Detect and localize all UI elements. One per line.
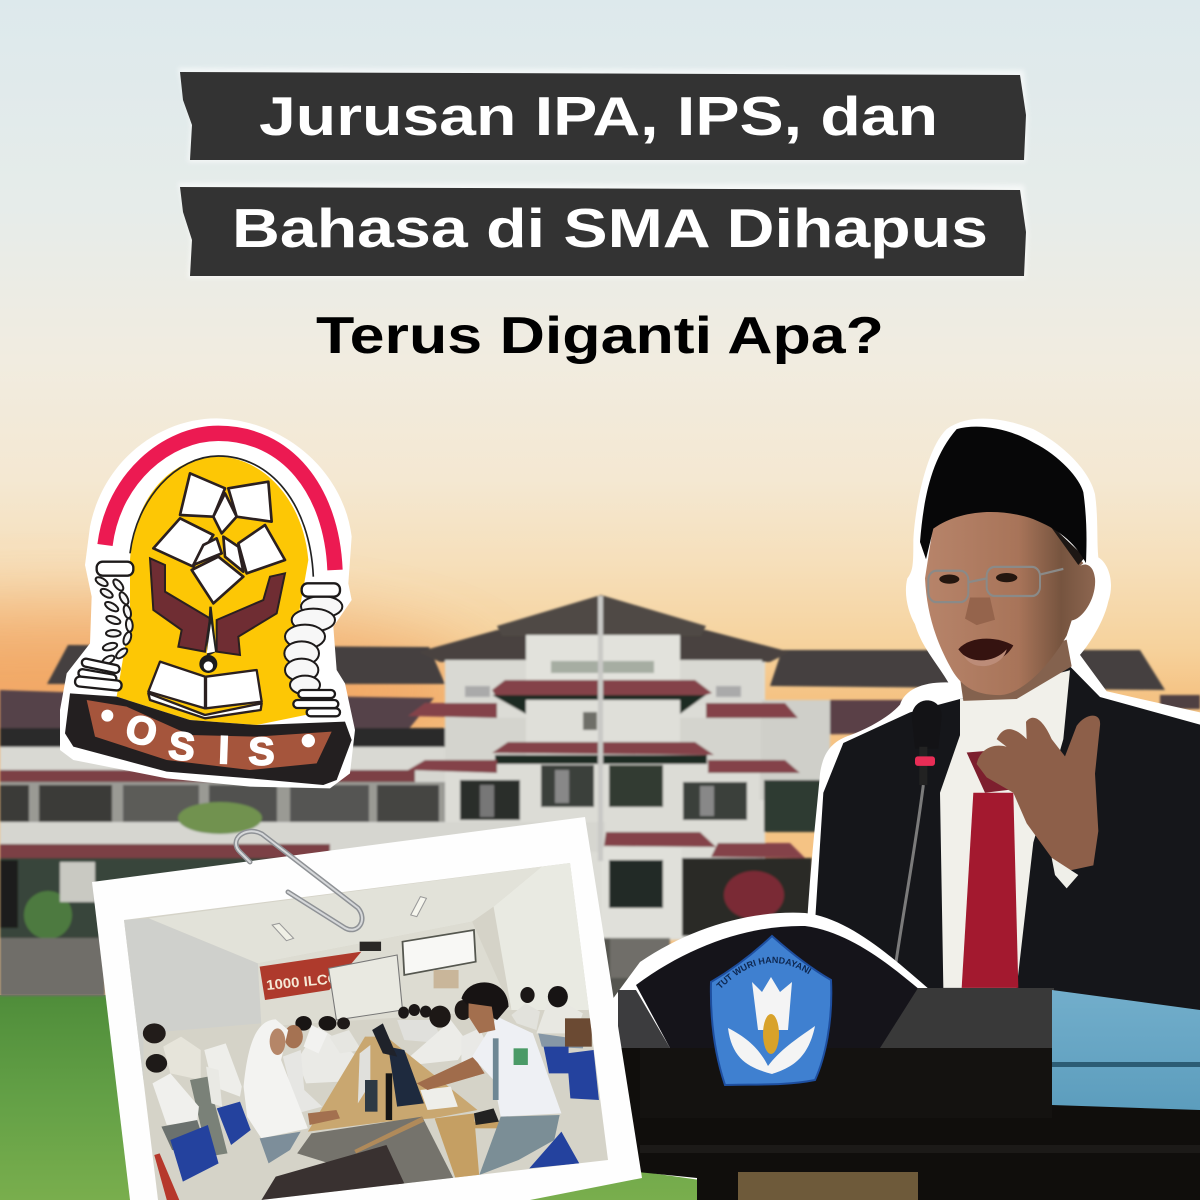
ceiling [149, 867, 542, 963]
lamps [272, 923, 294, 941]
poster [434, 970, 459, 988]
tower windows [460, 780, 520, 820]
bag [261, 1145, 404, 1200]
podium [614, 912, 1200, 1200]
red arch [105, 433, 335, 570]
eyes [939, 575, 959, 584]
title strip 1: Jurusan IPA, IPS, dan [259, 85, 938, 147]
shirt [940, 670, 1070, 988]
papers [420, 1087, 458, 1110]
emblem [710, 934, 832, 1086]
back wall [258, 922, 511, 1027]
ribbon label: O [121, 706, 162, 756]
paper clip [236, 831, 362, 930]
speaker figure [807, 419, 1200, 1010]
ribbon label: S [248, 730, 275, 774]
tower tier 1 [492, 680, 712, 695]
left roofs [47, 645, 445, 684]
white arch [120, 448, 323, 577]
hands [150, 558, 285, 655]
flag pole [598, 596, 603, 861]
left wall [124, 920, 125, 921]
photo print [92, 817, 642, 1200]
white cutout outline [807, 419, 1200, 1010]
yellow shield [117, 457, 313, 725]
stone sides [618, 990, 670, 1050]
green trees [178, 802, 262, 834]
classroom photo: 1000 ILCC [265, 971, 340, 994]
OSIS logo [60, 418, 355, 788]
left students [163, 1037, 201, 1080]
cotton [284, 596, 342, 694]
podium top [636, 926, 920, 1048]
tie [962, 749, 1018, 988]
podium body [618, 1048, 1200, 1200]
face [925, 502, 1095, 695]
middle row students [301, 1026, 354, 1084]
lawn [0, 995, 700, 1200]
peci cap [920, 427, 1087, 563]
wood carving [738, 1172, 918, 1200]
emblem: TUT WURI HANDAYANI [716, 956, 812, 988]
suit [815, 666, 1200, 1010]
first-floor windows [0, 782, 445, 822]
ribbon dots [101, 710, 113, 722]
front student [417, 1057, 485, 1090]
subtitle: Terus Diganti Apa? [316, 307, 884, 365]
classroom photo [111, 853, 619, 1200]
podium outline [612, 913, 930, 1180]
table [308, 1037, 477, 1132]
red plants [724, 871, 784, 919]
ribbon label: I [218, 728, 230, 772]
projector [360, 942, 381, 951]
back right students [512, 1010, 540, 1030]
whiteboard [329, 955, 402, 1020]
blue panel [1052, 990, 1200, 1110]
bag strap [354, 1117, 424, 1153]
flower [153, 473, 285, 603]
shirt cuff [1052, 858, 1078, 888]
pen [199, 607, 217, 673]
wheat [94, 575, 133, 666]
sticker outline [60, 418, 355, 788]
blue stools [170, 1125, 219, 1182]
inner arch line [130, 456, 313, 577]
right roofs [770, 650, 1165, 690]
book [148, 662, 262, 718]
hijab student [244, 1019, 308, 1138]
ribbon label [121, 706, 275, 774]
stone walls [0, 938, 105, 996]
ribbon tie caps [75, 562, 340, 716]
roofs top tower [418, 630, 790, 662]
mouth [958, 639, 1013, 663]
banner [260, 952, 361, 1000]
school building [0, 595, 1200, 1000]
neck [960, 640, 1072, 701]
title strip 2 [178, 183, 1028, 278]
lower tower [445, 822, 605, 852]
hair side [1047, 521, 1085, 565]
right wall [494, 863, 590, 1010]
right row students [397, 1020, 438, 1042]
title strip 2: Bahasa di SMA Dihapus [232, 197, 988, 259]
monitors [388, 1047, 424, 1107]
microphone head [912, 700, 942, 785]
glasses [928, 567, 1063, 602]
ribbon label: S [166, 723, 197, 770]
title strip 1 [178, 68, 1028, 162]
ribbon inner [87, 700, 332, 770]
nose shadow [965, 598, 995, 625]
windows [402, 930, 476, 975]
ribbon [65, 693, 352, 785]
hand [977, 716, 1100, 871]
microphone stem [895, 785, 923, 969]
tower tier 2 [492, 742, 714, 755]
